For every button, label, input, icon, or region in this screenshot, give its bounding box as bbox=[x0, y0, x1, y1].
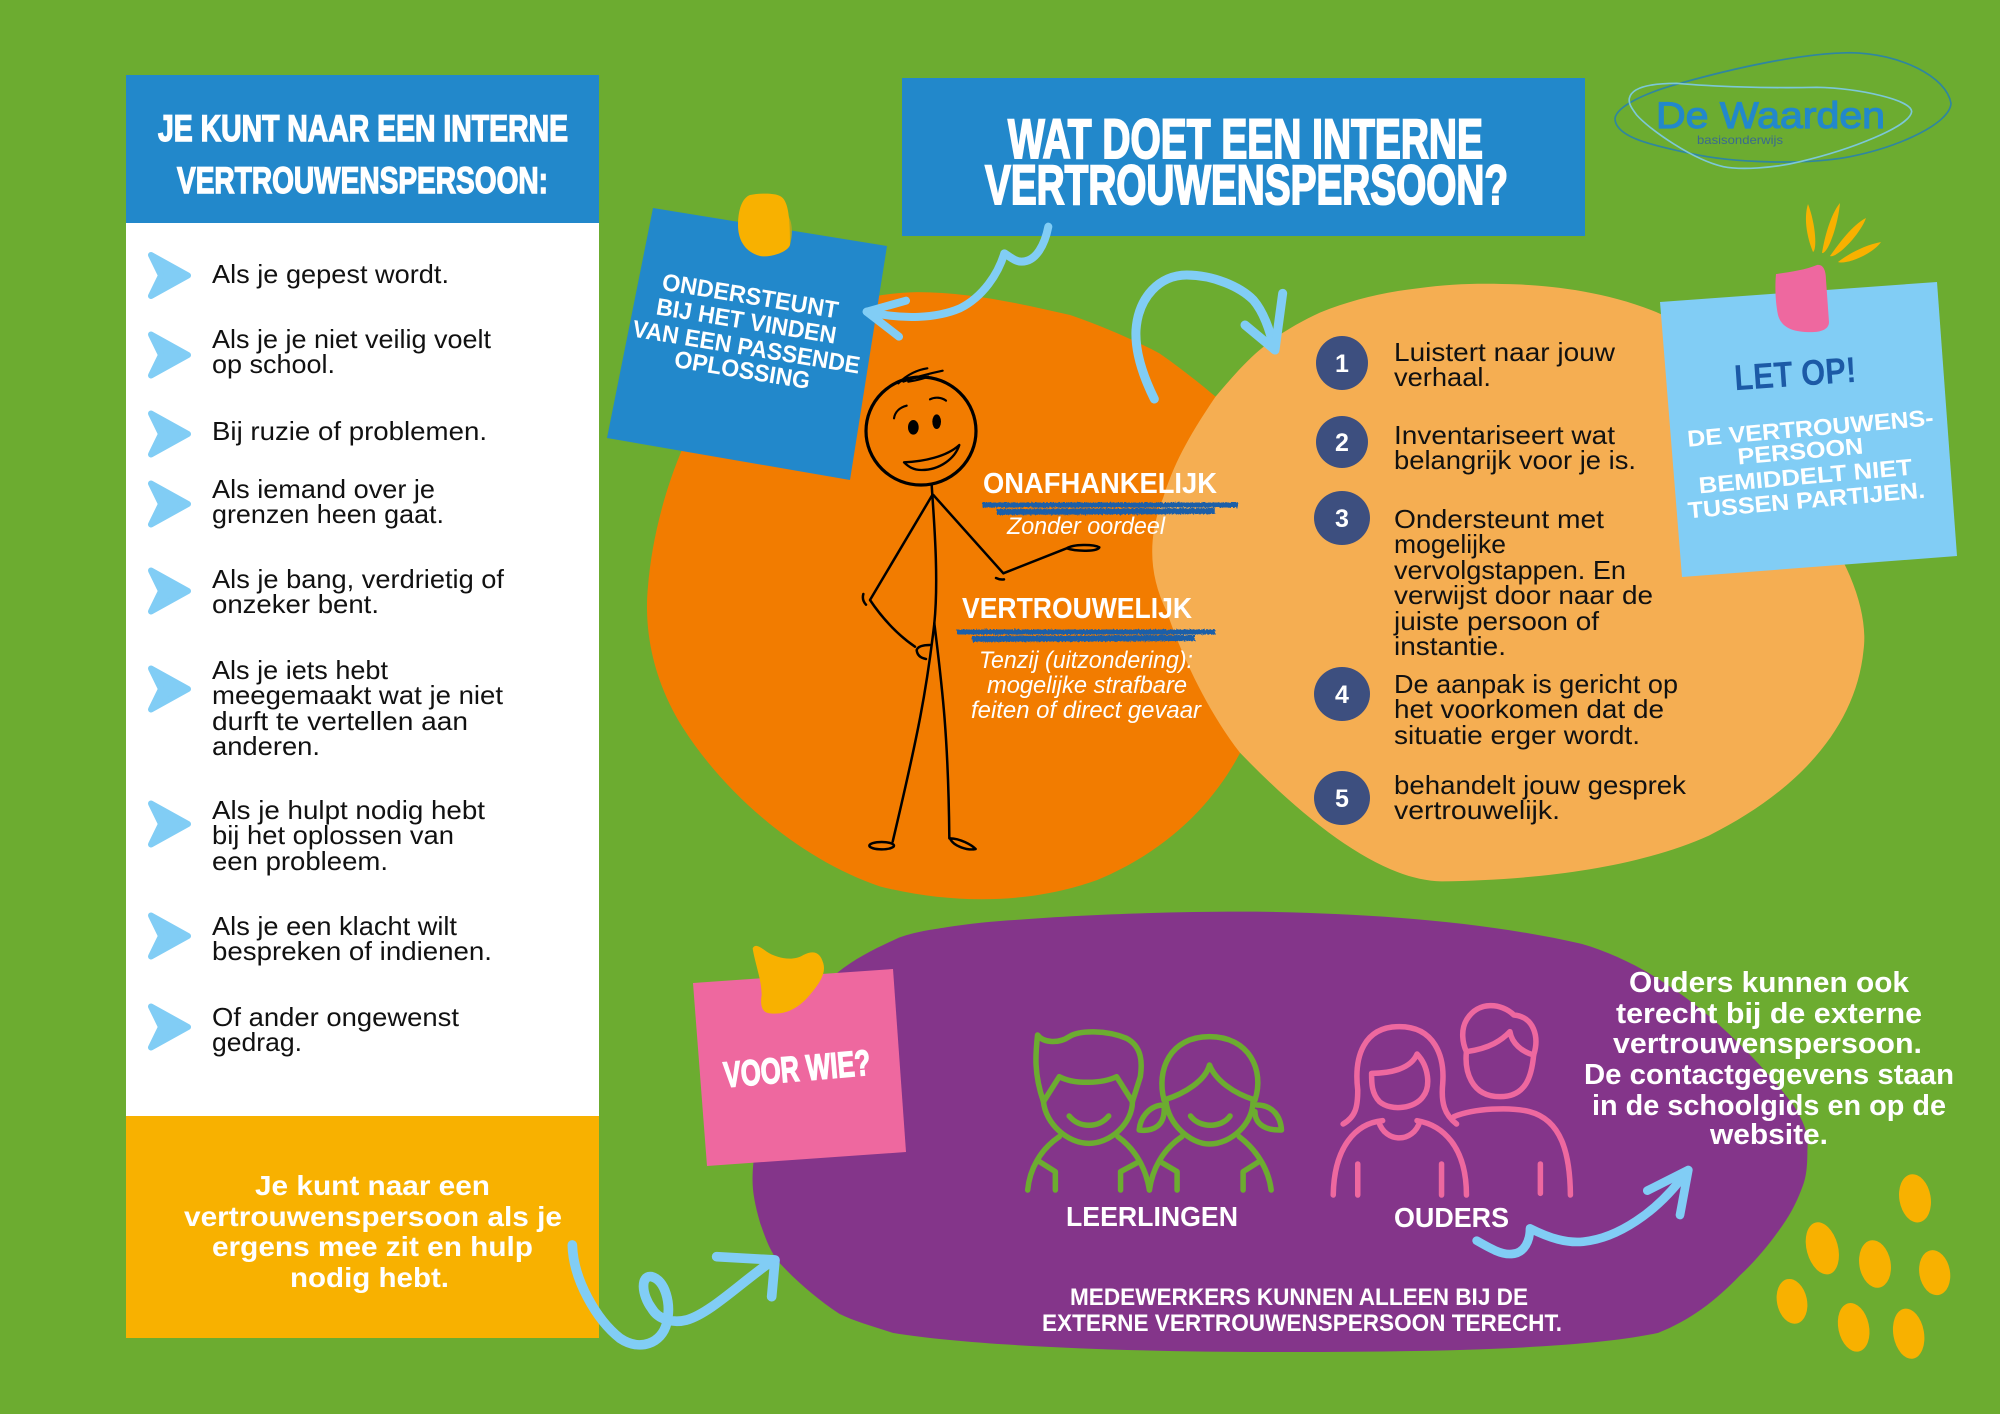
label: ouders: OUDERS bbox=[1394, 1202, 1509, 1233]
panel: yellow summary: ergens mee zit en hulp bbox=[212, 1231, 533, 1262]
body bbox=[863, 485, 1099, 849]
step 5: 5 bbox=[1335, 785, 1349, 813]
text: vertrouwelijk: Tenzij (uitzondering): bbox=[979, 647, 1193, 674]
title: VERTROUWENSPERSOON? bbox=[985, 153, 1508, 216]
title bbox=[902, 78, 1585, 236]
text: ouders kunnen ook: Ouders kunnen ook bbox=[1629, 967, 1910, 999]
list text: onzeker bent. bbox=[212, 589, 379, 619]
note: let op bbox=[1660, 265, 1957, 577]
face bbox=[894, 368, 959, 470]
step 5: vertrouwelijk. bbox=[1394, 795, 1560, 825]
list text: Als je gepest wordt. bbox=[212, 259, 449, 289]
step 1: Luistert naar jouw bbox=[1394, 337, 1615, 367]
note: ondersteunt: OPLOSSING bbox=[672, 346, 812, 395]
text: ouders kunnen ook: De contactgegevens staan bbox=[1584, 1059, 1954, 1091]
step 1 bbox=[1316, 336, 1615, 392]
logo: De Waarden bbox=[1615, 53, 1951, 168]
text: vertrouwelijk: VERTROUWELIJK bbox=[962, 593, 1192, 625]
orange blob bbox=[647, 292, 1256, 899]
arrow: loop to purple blob bbox=[572, 1245, 775, 1345]
head bbox=[866, 377, 976, 485]
panel body bbox=[126, 223, 599, 1116]
text: ouders kunnen ook bbox=[1584, 967, 1954, 1151]
list text: Als je je niet veilig voelt bbox=[212, 324, 492, 354]
list text: gedrag. bbox=[212, 1027, 302, 1057]
list text bbox=[212, 259, 505, 1057]
list text: een probleem. bbox=[212, 846, 388, 876]
icon: sparks bbox=[1806, 203, 1881, 263]
text: ouders kunnen ook: terecht bij de externe bbox=[1616, 998, 1922, 1030]
list item icons: chevrons bbox=[151, 255, 188, 1048]
step 3 bbox=[1314, 491, 1653, 661]
list text: Als je hulpt nodig hebt bbox=[212, 795, 486, 825]
text: ouders kunnen ook: in de schoolgids en op de bbox=[1592, 1090, 1946, 1122]
list text: bespreken of indienen. bbox=[212, 936, 492, 966]
step 1: verhaal. bbox=[1394, 362, 1491, 392]
step 3: instantie. bbox=[1394, 631, 1506, 661]
list text: Als je bang, verdrietig of bbox=[212, 564, 505, 594]
title: WAT DOET EEN INTERNE bbox=[1008, 107, 1483, 170]
text: ouders kunnen ook: vertrouwenspersoon. bbox=[1613, 1028, 1922, 1060]
step 2: 2 bbox=[1335, 429, 1349, 457]
list text: Bij ruzie of problemen. bbox=[212, 416, 487, 446]
purple blob bbox=[753, 912, 1808, 1352]
text: vertrouwelijk bbox=[957, 593, 1215, 724]
text: onafhankelijk bbox=[982, 468, 1238, 540]
list text: Als je een klacht wilt bbox=[212, 911, 458, 941]
icon: parents bbox=[1333, 1006, 1570, 1195]
text: medewerkers bbox=[1042, 1284, 1562, 1337]
tape: pink bbox=[1775, 265, 1829, 332]
stick figure bbox=[863, 368, 1099, 849]
peach blob bbox=[1152, 284, 1864, 881]
list text: op school. bbox=[212, 349, 335, 379]
left panel heading bbox=[126, 75, 599, 223]
list text: Als iemand over je bbox=[212, 474, 435, 504]
panel: yellow summary: nodig hebt. bbox=[290, 1262, 449, 1293]
text: vertrouwelijk: feiten of direct gevaar bbox=[971, 697, 1202, 724]
text: medewerkers: EXTERNE VERTROUWENSPERSOON TERECHT. bbox=[1042, 1310, 1562, 1337]
text: medewerkers: MEDEWERKERS KUNNEN ALLEEN BIJ DE bbox=[1070, 1284, 1528, 1311]
numbered list bbox=[1314, 336, 1687, 825]
step 3: verwijst door naar de bbox=[1394, 580, 1653, 610]
step 5: behandelt jouw gesprek bbox=[1394, 770, 1687, 800]
step 3: 3 bbox=[1335, 505, 1349, 533]
icon: children bbox=[1028, 1032, 1281, 1190]
step 4: het voorkomen dat de bbox=[1394, 694, 1664, 724]
note: let op: PERSOON bbox=[1736, 433, 1864, 469]
note: ondersteunt: ONDERSTEUNT bbox=[660, 269, 841, 324]
tape: yellow blob bbox=[753, 946, 824, 1014]
list text: durft te vertellen aan bbox=[212, 706, 468, 736]
note: ondersteunt: VAN EEN PASSENDE bbox=[631, 316, 862, 380]
step 4: De aanpak is gericht op bbox=[1394, 669, 1678, 699]
list text: bij het oplossen van bbox=[212, 820, 454, 850]
step 3: Ondersteunt met bbox=[1394, 504, 1605, 534]
step 2: belangrijk voor je is. bbox=[1394, 445, 1636, 475]
list text: meegemaakt wat je niet bbox=[212, 680, 504, 710]
text: onafhankelijk: ONAFHANKELIJK bbox=[983, 468, 1217, 500]
step 3: mogelijke bbox=[1394, 529, 1506, 559]
list text: anderen. bbox=[212, 731, 320, 761]
note: let op: BEMIDDELT NIET bbox=[1698, 454, 1913, 498]
logo: De Waarden: basisonderwijs bbox=[1697, 133, 1783, 147]
step 1: 1 bbox=[1335, 350, 1349, 378]
step 5 bbox=[1314, 770, 1687, 825]
text: onafhankelijk: Zonder oordeel bbox=[1006, 513, 1166, 540]
step 4: situatie erger wordt. bbox=[1394, 720, 1640, 750]
text: ouders kunnen ook: website. bbox=[1709, 1119, 1828, 1151]
step 3: vervolgstappen. En bbox=[1394, 555, 1626, 585]
note: let op: LET OP! bbox=[1733, 349, 1857, 398]
step 2 bbox=[1316, 416, 1636, 475]
note: let op: TUSSEN PARTIJEN. bbox=[1687, 477, 1926, 523]
step 4: 4 bbox=[1335, 681, 1349, 709]
step 3: juiste persoon of bbox=[1393, 606, 1600, 636]
logo: De Waarden: De Waarden bbox=[1656, 95, 1885, 136]
step 4 bbox=[1314, 667, 1678, 750]
list text: grenzen heen gaat. bbox=[212, 499, 444, 529]
arrow: to peach blob bbox=[1136, 275, 1283, 399]
note: voor wie: VOOR WIE? bbox=[722, 1042, 872, 1095]
text: vertrouwelijk: mogelijke strafbare bbox=[987, 672, 1187, 699]
list text: Of ander ongewenst bbox=[212, 1002, 460, 1032]
step 2: Inventariseert wat bbox=[1394, 420, 1616, 450]
list text: Als je iets hebt bbox=[212, 655, 389, 685]
label: leerlingen: LEERLINGEN bbox=[1066, 1201, 1238, 1232]
note: ondersteunt: BIJ HET VINDEN bbox=[654, 294, 838, 350]
panel: yellow summary: vertrouwenspersoon als je bbox=[184, 1201, 562, 1232]
arrow: ouders to text bbox=[1477, 1170, 1688, 1254]
tape: yellow bbox=[738, 194, 792, 256]
panel: left list bbox=[126, 75, 599, 1116]
arrow: title to note bbox=[867, 227, 1048, 337]
panel: yellow summary: Je kunt naar een bbox=[255, 1170, 490, 1201]
left panel heading: VERTROUWENSPERSOON: bbox=[177, 160, 548, 201]
icon: yellow dots bbox=[1773, 1172, 1954, 1361]
note: let op: DE VERTROUWENS- bbox=[1686, 404, 1934, 452]
note: ondersteunt bbox=[607, 194, 887, 480]
panel: yellow summary bbox=[126, 1116, 599, 1338]
left panel heading: JE KUNT NAAR EEN INTERNE bbox=[158, 108, 568, 149]
note: voor wie bbox=[693, 946, 906, 1166]
